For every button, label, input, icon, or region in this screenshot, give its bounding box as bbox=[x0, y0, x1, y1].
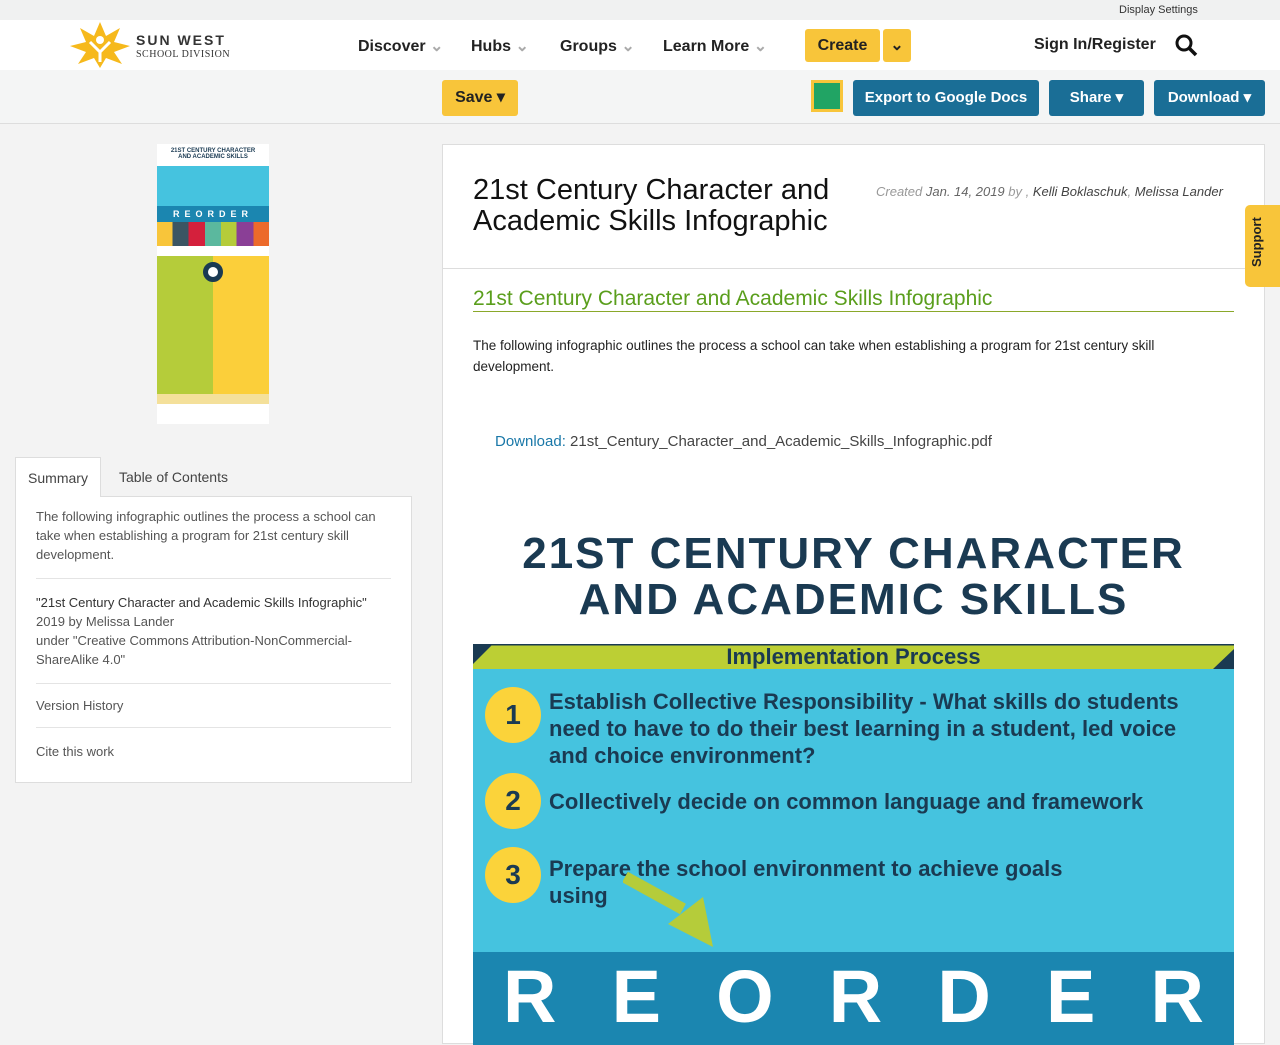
REORDER band: O bbox=[716, 955, 774, 1038]
main content panel: Created Jan. 14, 2019 by , Kelli Boklaschuk, Melissa Lander bbox=[876, 184, 1223, 199]
top strip: Display Settings bbox=[1119, 4, 1198, 16]
header bar: Hubs ⌄ bbox=[471, 38, 529, 55]
tabs panel: under "Creative Commons Attribution-NonCommercial-ShareAlike 4.0" bbox=[36, 633, 352, 667]
cyan steps area: Establish Collective Responsibility - What skills do students need to have to do their best learning in a student, led voice and choice environment? bbox=[549, 689, 1179, 768]
step 1 bbox=[485, 687, 541, 743]
tabs panel: "21st Century Character and Academic Skills Infographic" bbox=[36, 595, 367, 610]
cyan steps area: Prepare the school environment to achieve goals bbox=[549, 856, 1062, 881]
infographic bbox=[473, 529, 1234, 1045]
section heading bbox=[473, 287, 1234, 312]
tabs panel bbox=[15, 457, 412, 783]
thumbnail bbox=[157, 144, 269, 424]
cyan steps area bbox=[473, 669, 1234, 952]
thumbnail: AND ACADEMIC SKILLS bbox=[178, 154, 248, 160]
REORDER band: E bbox=[612, 955, 661, 1038]
tabs panel: The following infographic outlines the process a school can take when establishing a program for 21st century skill development. bbox=[36, 509, 376, 562]
cyan steps area: Collectively decide on common language and framework bbox=[549, 789, 1143, 814]
toolbar: Export to Google Docs bbox=[865, 89, 1027, 106]
step 3 bbox=[485, 847, 541, 903]
REORDER band: R bbox=[1150, 955, 1204, 1038]
create button bbox=[805, 29, 880, 62]
toolbar bbox=[0, 70, 1280, 124]
cyan steps area: using bbox=[549, 883, 608, 908]
nav: Discover ⌄ bbox=[358, 38, 443, 55]
step 2: 2 bbox=[505, 785, 521, 816]
icon: search bbox=[1176, 34, 1198, 56]
description: The following infographic outlines the process a school can take when establishing a program for 21st century skill development. bbox=[473, 338, 1154, 374]
support tab bbox=[1245, 205, 1280, 287]
REORDER band: D bbox=[937, 955, 991, 1038]
REORDER band bbox=[473, 952, 1234, 1045]
step 2 bbox=[485, 773, 541, 829]
toolbar: Share ▾ bbox=[1070, 89, 1123, 106]
step 3: 3 bbox=[505, 859, 521, 890]
title: 21st Century Character and bbox=[473, 174, 829, 206]
step 1: 1 bbox=[505, 699, 521, 730]
tabs panel: Cite this work bbox=[36, 744, 114, 759]
logo: SCHOOL DIVISION bbox=[136, 49, 230, 60]
title bbox=[473, 174, 829, 237]
create button: Create bbox=[818, 37, 867, 54]
header bar: Learn More ⌄ bbox=[663, 38, 767, 55]
REORDER band: R bbox=[503, 955, 556, 1038]
REORDER band: E bbox=[1046, 955, 1095, 1038]
tabs panel: Table of Contents bbox=[119, 469, 228, 485]
logo: SUN WEST bbox=[136, 32, 226, 48]
header bar: Groups ⌄ bbox=[560, 38, 635, 55]
infographic title bbox=[522, 529, 1185, 624]
download link: Download: 21st_Century_Character_and_Academic_Skills_Infographic.pdf bbox=[495, 433, 992, 450]
implementation bar: Implementation Process bbox=[726, 644, 981, 669]
tabs panel: 2019 by Melissa Lander bbox=[36, 614, 174, 629]
title: Academic Skills Infographic bbox=[473, 205, 828, 237]
REORDER band: R bbox=[829, 955, 882, 1038]
toolbar: Download ▾ bbox=[1168, 89, 1251, 106]
header bar: Sign In/Register bbox=[1034, 36, 1156, 53]
tabs panel: Version History bbox=[36, 698, 123, 713]
thumbnail: REORDER bbox=[173, 209, 253, 219]
logo bbox=[70, 22, 230, 68]
top strip bbox=[0, 0, 1280, 20]
arrow bbox=[623, 872, 713, 947]
support tab: Support bbox=[1249, 217, 1264, 267]
header bar bbox=[0, 20, 1280, 70]
implementation bar bbox=[473, 644, 1234, 669]
thumbnail: 21ST CENTURY CHARACTER bbox=[171, 148, 255, 154]
icon: classroom bbox=[811, 80, 843, 112]
tabs panel: Summary bbox=[28, 470, 88, 486]
infographic title: 21ST CENTURY CHARACTER bbox=[522, 529, 1185, 578]
infographic title: AND ACADEMIC SKILLS bbox=[579, 575, 1128, 624]
header bar: ⌄ bbox=[890, 37, 904, 54]
toolbar: Save ▾ bbox=[455, 89, 505, 106]
main content panel bbox=[442, 144, 1265, 1044]
section heading: 21st Century Character and Academic Skills Infographic bbox=[473, 287, 992, 310]
